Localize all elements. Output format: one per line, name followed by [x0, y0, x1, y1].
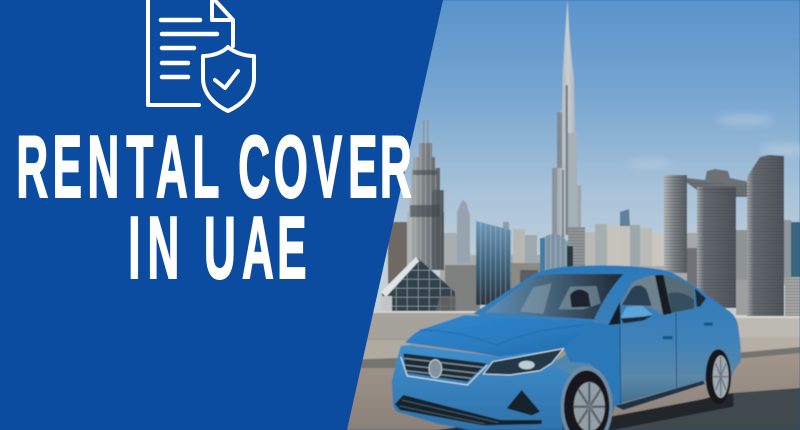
headlight: [483, 349, 563, 375]
shield: [203, 47, 254, 111]
check mark: [215, 71, 238, 88]
icon: document with security shield: [148, 0, 254, 111]
road and pavement: [340, 337, 800, 430]
skyscraper: glass tower: [476, 221, 511, 305]
distant city: [440, 200, 800, 318]
title line two: IN UAE: [128, 198, 306, 297]
document text lines: [161, 20, 217, 77]
clouds: [628, 115, 800, 168]
title line one: RENTAL COVER: [16, 117, 412, 216]
skyscraper: curved glass building: [540, 234, 573, 272]
rear wheel: [706, 349, 731, 404]
seat silhouette: [570, 290, 591, 307]
document outline: [148, 0, 233, 105]
panel: blue diagonal background: [0, 0, 443, 430]
front wheel: [564, 371, 609, 430]
windscreen reflections: [520, 283, 601, 314]
car: blue sedan: [392, 265, 741, 430]
grille: [401, 353, 487, 385]
title: RENTAL COVER IN UAE: [16, 117, 412, 297]
windscreen: [485, 274, 623, 319]
photo: Dubai skyline backdrop: [340, 0, 800, 430]
skyscraper: left tower with antennas: [407, 120, 444, 270]
concrete barrier: [360, 311, 800, 340]
ground shadow: [437, 393, 733, 430]
wing mirror: [608, 302, 653, 325]
wheel arch trim: [561, 366, 613, 430]
skyscraper: twin towers with sky bridge: [664, 155, 784, 317]
bumper: [392, 345, 574, 430]
car body: [473, 265, 741, 430]
hood: [405, 315, 594, 357]
front fender: [563, 321, 620, 407]
skyscraper: glass pyramid: [381, 257, 456, 312]
lower intake: [395, 390, 542, 425]
side windows: [620, 275, 706, 315]
skyscraper: brown block behind: [388, 222, 407, 284]
door handles: [663, 323, 713, 339]
lower trim: [615, 381, 705, 410]
skyscraper: Burj Khalifa: [552, 0, 585, 267]
